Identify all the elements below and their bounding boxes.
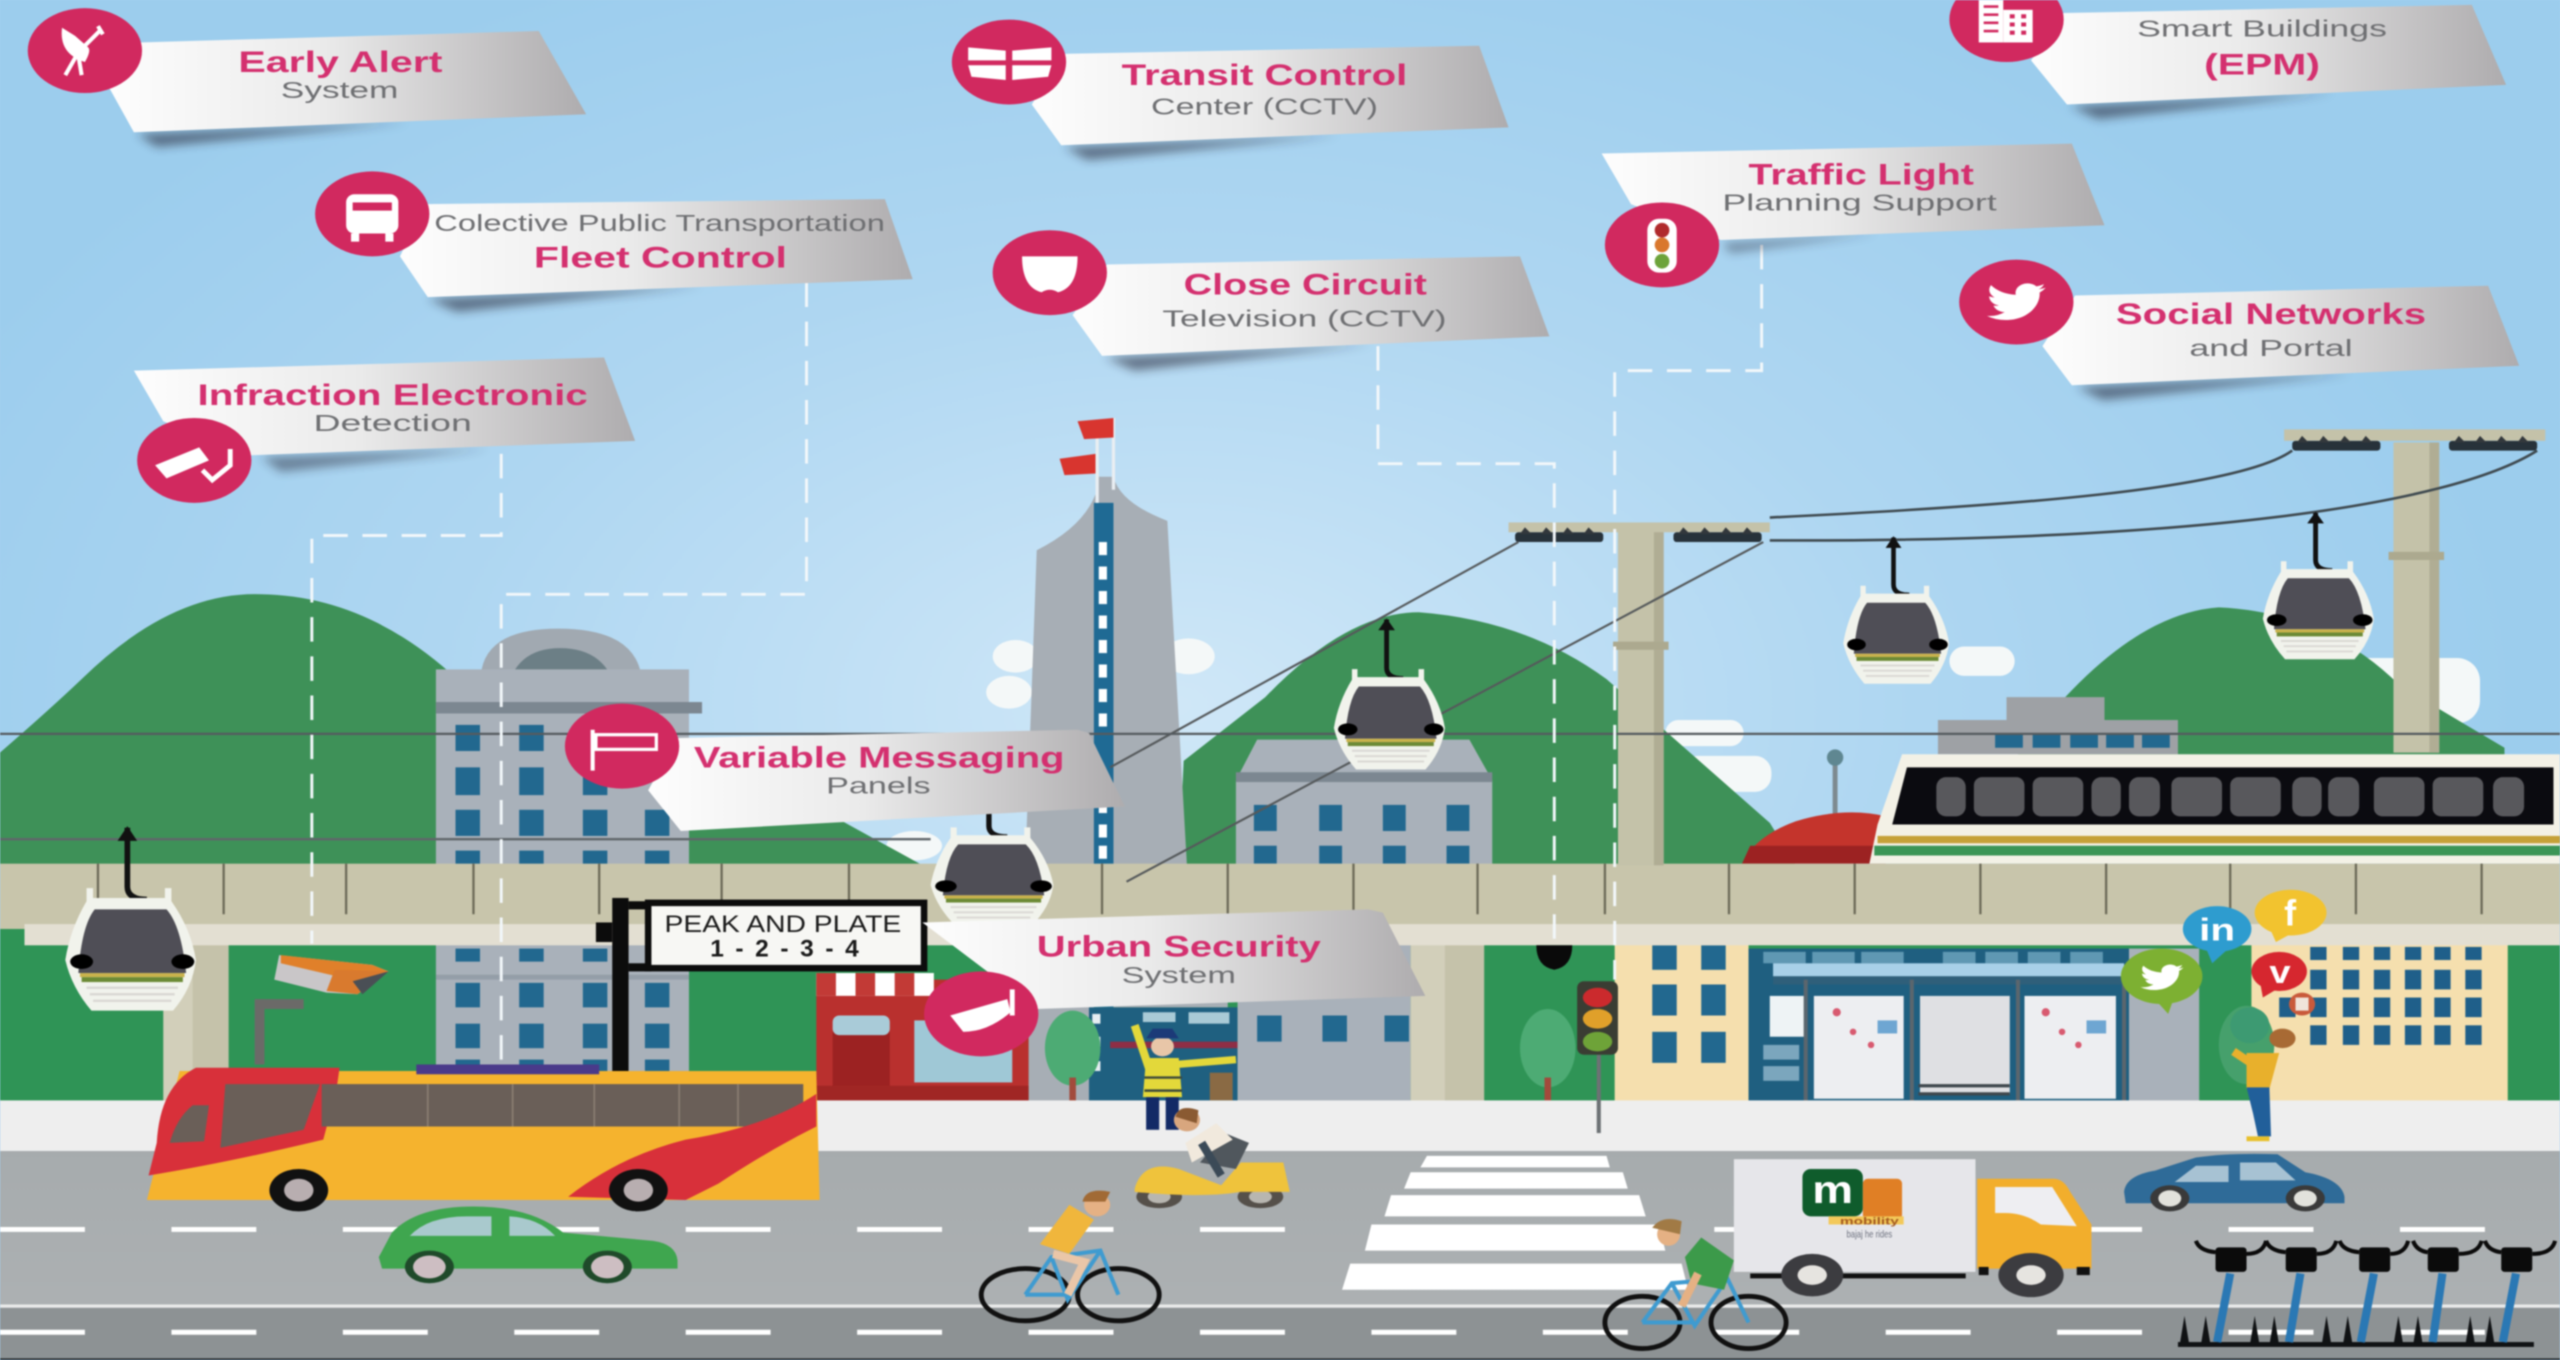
subheading: System — [281, 77, 398, 103]
heading: Fleet Control — [534, 242, 787, 275]
beige building — [1615, 944, 1749, 1102]
heading: Infraction Electronic — [198, 379, 588, 412]
dashed connector: fleet control — [501, 282, 807, 1069]
building: domed grey tower — [436, 629, 702, 865]
gondola 1 — [65, 826, 196, 1011]
icon: traffic camera — [137, 418, 251, 503]
panel: smart buildings — [1949, 0, 2506, 119]
viaduct deck — [0, 864, 2560, 945]
panel: urban security system — [922, 909, 1425, 1056]
icon: traffic light — [1605, 202, 1719, 287]
gondola 4 — [1843, 536, 1949, 684]
red dome and lamp — [1742, 749, 1886, 864]
panel: close circuit television — [993, 230, 1549, 371]
dashed connector: infraction detection — [312, 454, 501, 944]
social media bubbles: in — [2199, 912, 2235, 947]
peak and plate sign: PEAK AND PLATE — [664, 911, 901, 938]
delivery truck: mobility — [1840, 1216, 1900, 1227]
panel: early alert system — [28, 8, 586, 147]
green car — [379, 1207, 678, 1283]
clouds — [887, 638, 2480, 860]
subheading: Detection — [313, 410, 472, 436]
traffic signal — [1577, 981, 1618, 1133]
gondola 2 — [931, 778, 1053, 925]
icon: message sign — [565, 704, 679, 789]
heading: Traffic Light — [1749, 158, 1974, 191]
building: lower grey block left — [436, 944, 689, 1102]
icon: twitter bird — [1959, 260, 2073, 344]
subheading: Colective Public Transportation — [434, 210, 885, 236]
panel: variable messaging panels — [565, 704, 1125, 831]
viaduct lower green backdrop — [0, 918, 2560, 1102]
heading: Transit Control — [1122, 59, 1407, 92]
road — [0, 1151, 2560, 1360]
bike share rack — [2178, 1241, 2555, 1347]
panel: infraction electronic detection — [134, 358, 635, 503]
cable car wires — [0, 451, 2560, 882]
gondola 5 — [2263, 512, 2374, 659]
panel: fleet control — [315, 171, 913, 312]
heading: (EPM) — [2204, 48, 2320, 81]
street tree — [1045, 1011, 1100, 1109]
storefront — [816, 973, 1029, 1102]
dashed connector: CCTV — [1378, 346, 1554, 944]
icon: dome camera — [993, 230, 1107, 315]
icon: security camera — [924, 971, 1038, 1056]
building: centre grey block — [1236, 740, 1492, 865]
subheading: System — [1122, 962, 1236, 988]
cyclist 2 — [1605, 1219, 1786, 1349]
delivery truck: m — [1812, 1169, 1853, 1212]
icon: office building — [1949, 0, 2064, 62]
gondola 3 — [1334, 618, 1445, 770]
elevated train and station — [1869, 697, 2560, 864]
subheading: Smart Buildings — [2137, 16, 2387, 42]
beige building right with window grid — [2251, 944, 2508, 1102]
cyclist 1 — [981, 1191, 1159, 1321]
social media bubbles: v — [2269, 953, 2292, 990]
dashed connector: traffic light — [1615, 245, 1762, 980]
heading: Early Alert — [238, 46, 443, 79]
social media bubbles: f — [2284, 893, 2297, 934]
subheading: Center (CCTV) — [1151, 93, 1378, 119]
hills — [0, 594, 2504, 865]
pedestrian crossing — [1342, 1156, 1688, 1290]
subheading: Television (CCTV) — [1162, 306, 1447, 332]
peak and plate sign: 1-2-3-4 — [710, 936, 859, 963]
icon: bus — [315, 171, 429, 256]
pylon 2 — [2284, 429, 2545, 753]
bus — [147, 1064, 820, 1211]
tree behind signal — [1520, 1009, 1576, 1109]
traffic police officer — [1135, 1025, 1236, 1130]
icon: monitor wall — [952, 20, 1066, 104]
heading: Close Circuit — [1184, 269, 1427, 302]
subheading: Planning Support — [1722, 190, 1998, 216]
sidewalk — [0, 1100, 2560, 1151]
subheading: Panels — [826, 772, 931, 798]
delivery truck: bajaj he rides — [1847, 1230, 1892, 1241]
heading: Social Networks — [2116, 298, 2426, 331]
subheading: and Portal — [2189, 335, 2353, 361]
icon: satellite dish — [28, 8, 142, 93]
scooter with rider — [1135, 1108, 1290, 1208]
dome camera under viaduct — [1536, 945, 1572, 970]
blue car — [2124, 1154, 2344, 1211]
bus shelter — [1749, 949, 2199, 1119]
building: lower centre tower base and grey block — [1029, 944, 1484, 1102]
panel: social networks and portal — [1959, 260, 2519, 400]
heading: Urban Security — [1037, 931, 1322, 964]
person with phone — [2219, 1006, 2296, 1141]
road camera on pole — [260, 955, 389, 1064]
panel: traffic light planning support — [1602, 144, 2104, 287]
heading: Variable Messaging — [694, 741, 1064, 774]
pylon 1 — [1509, 522, 1770, 865]
peak and plate sign — [596, 898, 924, 1078]
social media bubbles — [2121, 890, 2327, 1016]
tower with flags — [1025, 418, 1187, 865]
panel: transit control center — [952, 20, 1509, 160]
delivery truck — [1734, 1159, 2091, 1297]
